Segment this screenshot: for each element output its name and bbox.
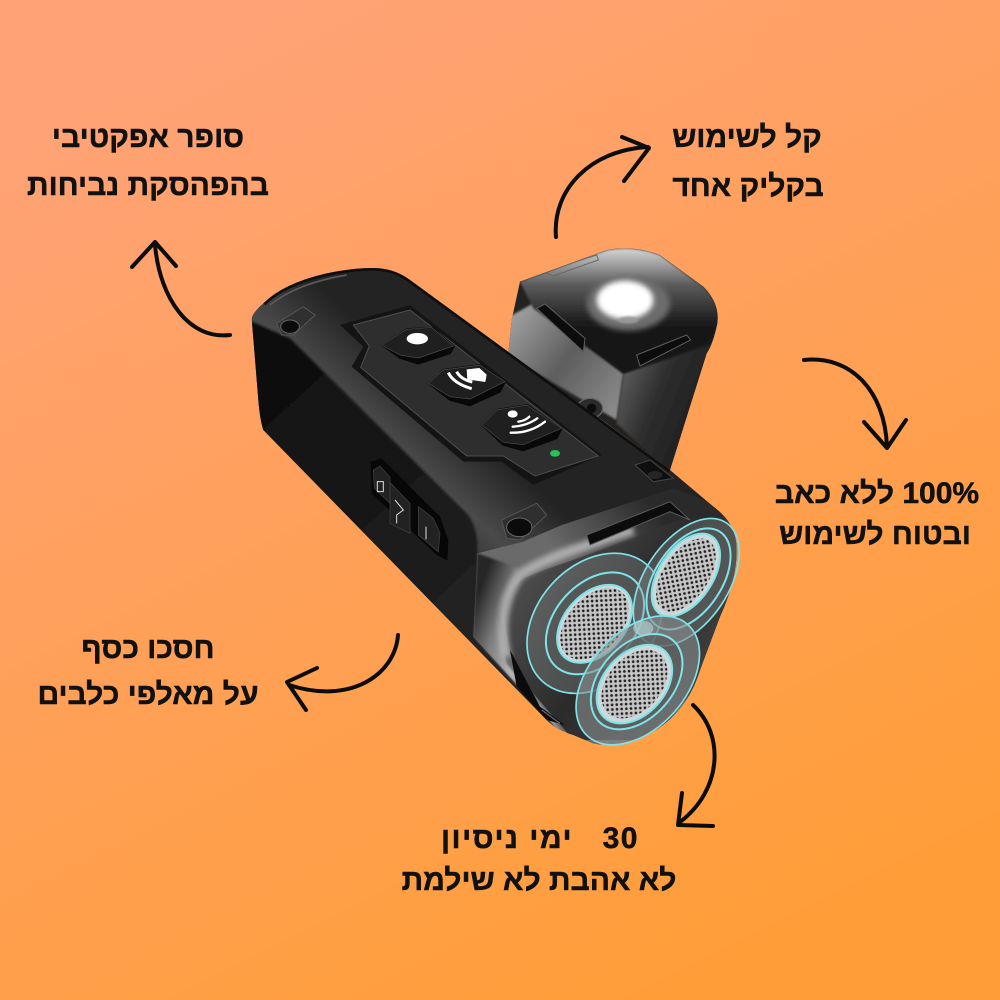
text: 30 day trial: לא אהבת לא שילמת bbox=[402, 864, 676, 897]
arrow: right bbox=[804, 360, 906, 448]
rear flashlight head bbox=[503, 243, 723, 477]
screws bbox=[277, 307, 673, 540]
text: painless and safe bbox=[775, 477, 979, 551]
left speaker with rings bbox=[499, 526, 691, 721]
text: painless and safe: 100% ללא כאב bbox=[775, 477, 979, 510]
collar highlight bbox=[503, 530, 633, 657]
text: painless and safe: ובטוח לשימוש bbox=[779, 518, 971, 551]
text: 30 day trial: 30 ימי ניסיון bbox=[441, 822, 639, 855]
text: 30 day trial bbox=[402, 822, 676, 897]
lower side port bbox=[510, 650, 565, 725]
arrow: top centre bbox=[556, 137, 649, 237]
text: super effective: סופר אפקטיבי bbox=[52, 121, 244, 154]
main body bbox=[240, 260, 747, 753]
text: super effective: בהפהסקת נביחות bbox=[27, 169, 269, 202]
text: super effective bbox=[27, 121, 269, 202]
button: ultrasonic bbox=[481, 404, 563, 451]
collar neck bbox=[473, 498, 737, 744]
front face bbox=[503, 517, 747, 740]
top vent slot bbox=[587, 502, 690, 545]
text: easy to use: בקליק אחד bbox=[672, 170, 824, 203]
button: sound beam bbox=[427, 364, 506, 406]
arrow: bottom left bbox=[287, 635, 398, 710]
arrow: top left bbox=[132, 242, 230, 335]
right speaker with rings bbox=[612, 500, 761, 665]
side face bbox=[252, 320, 556, 728]
text: save money: על מאלפי כלבים bbox=[38, 678, 258, 711]
text: save money: חסכו כסף bbox=[81, 632, 215, 665]
side switch bbox=[371, 458, 448, 561]
lens glow bbox=[587, 276, 670, 331]
text: save money bbox=[38, 632, 258, 711]
top dark shading bbox=[263, 268, 670, 470]
control panel bbox=[340, 305, 602, 485]
bottom speaker with rings bbox=[552, 592, 724, 768]
centre hub bbox=[633, 621, 653, 636]
product: ultrasonic dog repeller bbox=[252, 248, 740, 746]
button: flashlight bbox=[381, 327, 455, 365]
text: easy to use: קל לשימוש bbox=[672, 121, 822, 154]
text: easy to use bbox=[672, 121, 824, 203]
status LED bbox=[550, 450, 560, 457]
arrow: bottom bbox=[678, 705, 715, 826]
